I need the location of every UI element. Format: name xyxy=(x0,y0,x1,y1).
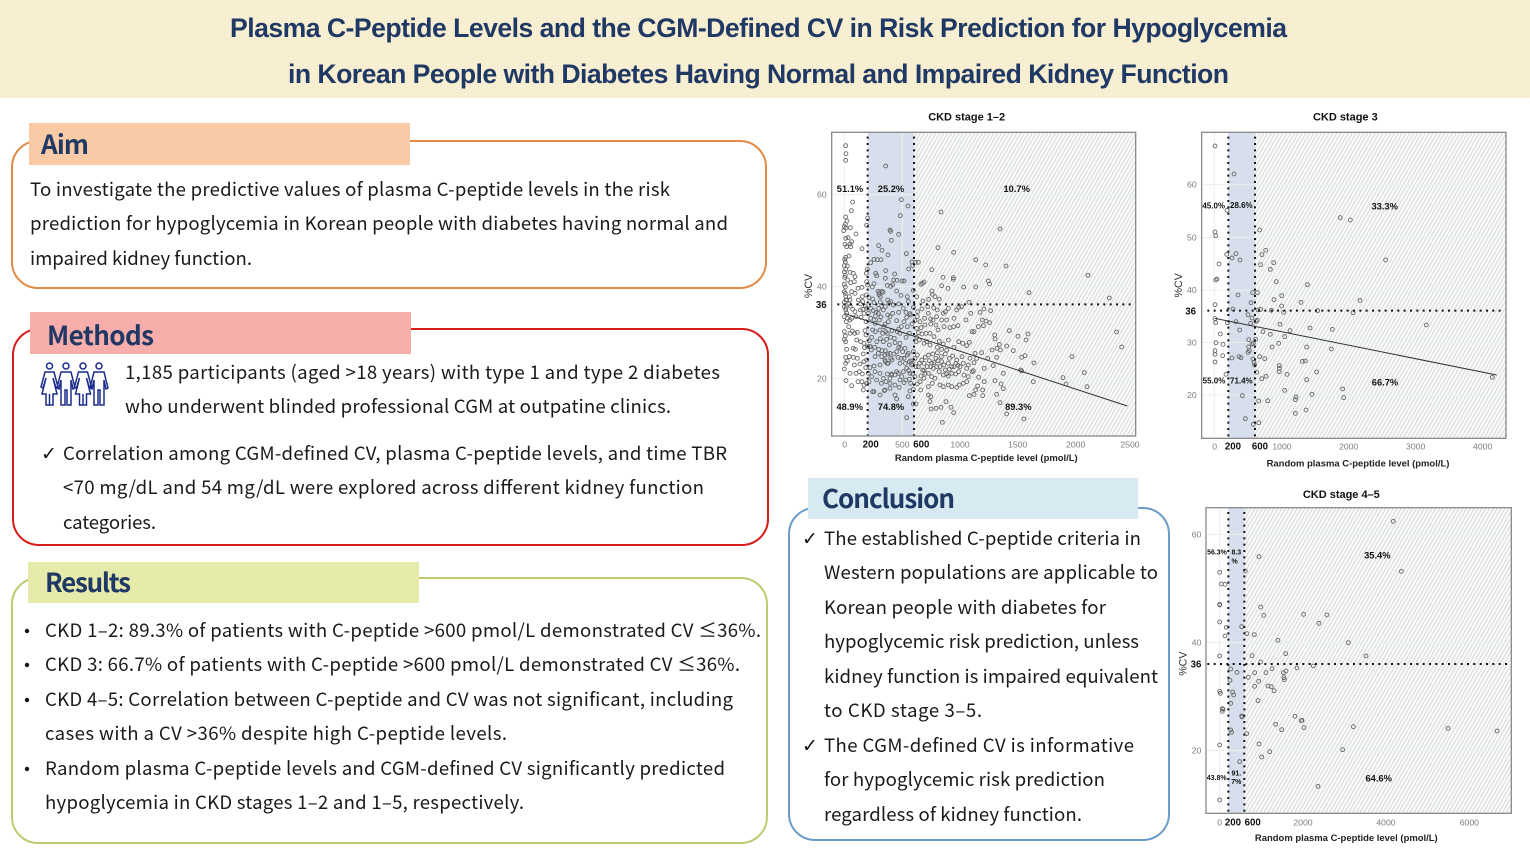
chart: CKD stage 4-5 scatter: 43.8% xyxy=(1207,775,1227,782)
chart: CKD stage 4-5 scatter: Random plasma C-peptide level (pmol/L) xyxy=(1255,833,1438,844)
text block: correlation: ✓ xyxy=(41,443,57,465)
chart: CKD stage 3 scatter: 3000 xyxy=(1406,441,1425,451)
chart: CKD stage 4-5 scatter: 36 xyxy=(1191,659,1202,670)
chart: CKD stage 1-2 scatter: %CV xyxy=(803,273,815,298)
chart: CKD stage 3 scatter: 30 xyxy=(1187,337,1197,347)
chart: CKD stage 3 scatter: 200 xyxy=(1225,442,1241,453)
text block: conclusion list: kidney function is impaired equivalent xyxy=(824,662,1158,689)
chart: CKD stage 4-5 scatter: 6000 xyxy=(1460,817,1479,827)
chart: CKD stage 4-5 scatter: % xyxy=(1232,558,1239,565)
chart: CKD stage 4-5 scatter: 56.3% xyxy=(1207,550,1228,557)
text block: conclusion list: to CKD stage 3–5. xyxy=(824,696,982,723)
chart: CKD stage 1-2 scatter: 200 xyxy=(863,440,879,451)
chart: CKD stage 1-2 scatter: 74.8% xyxy=(878,402,905,412)
panel: conclusion xyxy=(789,478,1169,840)
chart: CKD stage 4-5 scatter: 91. xyxy=(1231,770,1241,777)
chart: CKD stage 4-5 scatter: 600 xyxy=(1245,818,1261,829)
text block: correlation: <70 mg/dL and 54 mg/dL were explored across different kidney function xyxy=(63,473,704,500)
text block: results list xyxy=(25,616,761,815)
text block: conclusion list: ✓ xyxy=(802,528,818,550)
chart: CKD stage 1-2 scatter: 10.7% xyxy=(1003,184,1031,194)
chart: CKD stage 4-5 scatter: %CV xyxy=(1178,651,1190,676)
chart: CKD stage 1-2 scatter: 51.1% xyxy=(837,184,864,194)
chart: CKD stage 3 scatter: 50 xyxy=(1187,232,1197,242)
heading: methods: Methods xyxy=(47,316,154,353)
chart: CKD stage 3 scatter: 2000 xyxy=(1339,441,1358,451)
text block: participants: who underwent blinded professional CGM at outpatine clinics. xyxy=(125,392,671,419)
panel: aim xyxy=(12,123,766,288)
chart: CKD stage 3 scatter: 36 xyxy=(1185,306,1197,317)
icon: participants xyxy=(41,363,108,405)
chart: CKD stage 3 scatter: 45.0% xyxy=(1202,201,1225,210)
chart: CKD stage 1-2 scatter: 500 xyxy=(895,439,910,449)
panel: results xyxy=(12,562,767,843)
chart: CKD stage 4-5 scatter: CKD stage 4–5 xyxy=(1303,489,1380,501)
chart: CKD stage 1-2 scatter: 0 xyxy=(842,439,847,449)
heading: results: Results xyxy=(45,563,131,600)
text block: correlation: Correlation among CGM-defined CV, plasma C-peptide levels, and time TBR xyxy=(63,439,727,466)
chart: CKD stage 1-2 scatter: 600 xyxy=(913,440,929,451)
chart: CKD stage 3 scatter: 28.6% xyxy=(1230,201,1253,210)
chart: CKD stage 3 scatter: 4000 xyxy=(1473,441,1492,451)
chart: CKD stage 4-5 scatter: 2000 xyxy=(1293,817,1313,827)
chart: CKD stage 1-2 scatter: 48.9% xyxy=(836,402,864,412)
chart: CKD stage 3 scatter: 33.3% xyxy=(1371,202,1399,212)
text block: results list: CKD 4–5: Correlation between C-peptide and CV was not significant, including xyxy=(45,685,734,712)
title banner xyxy=(0,0,1530,98)
chart: CKD stage 3 scatter: 1000 xyxy=(1272,441,1292,451)
text block: conclusion list: ✓ xyxy=(802,735,818,757)
text block: results list: CKD 1–2: 89.3% of patients with C-peptide >600 pmol/L demonstrated CV ≤36%. xyxy=(45,616,761,643)
chart: CKD stage 4-5 scatter xyxy=(1178,489,1511,844)
chart: CKD stage 1-2 scatter: 2500 xyxy=(1120,439,1140,449)
text block: conclusion list: Western populations are applicable to xyxy=(824,558,1158,585)
chart: CKD stage 1-2 scatter: CKD stage 1–2 xyxy=(928,111,1005,123)
chart: CKD stage 4-5 scatter: 35.4% xyxy=(1364,551,1391,561)
text block: aim: prediction for hypoglycemia in Korean people with diabetes having normal and xyxy=(30,209,728,236)
text block: correlation: categories. xyxy=(63,508,156,535)
chart: CKD stage 3 scatter: CKD stage 3 xyxy=(1313,111,1378,123)
panel: methods xyxy=(13,312,768,545)
text block: conclusion list: The established C-peptide criteria in xyxy=(824,524,1141,551)
chart: CKD stage 4-5 scatter: 60 xyxy=(1192,529,1202,539)
chart: CKD stage 4-5 scatter: 8.3 xyxy=(1231,550,1241,557)
text block: conclusion list: The CGM-defined CV is informative xyxy=(824,731,1134,758)
heading: results xyxy=(28,562,419,603)
text block: conclusion list: Korean people with diabetes for xyxy=(824,593,1107,620)
chart: CKD stage 3 scatter: %CV xyxy=(1173,272,1185,297)
chart: CKD stage 4-5 scatter: 0 xyxy=(1217,817,1222,827)
chart: CKD stage 1-2 scatter: 89.3% xyxy=(1005,402,1032,412)
text block: aim xyxy=(30,175,728,271)
text block: correlation xyxy=(41,439,727,535)
chart: CKD stage 1-2 scatter: 60 xyxy=(817,190,827,200)
chart: CKD stage 1-2 scatter: Random plasma C-peptide level (pmol/L) xyxy=(895,453,1078,464)
chart: CKD stage 4-5 scatter: 64.6% xyxy=(1365,774,1393,784)
text block: participants xyxy=(125,358,720,419)
title banner: in Korean People with Diabetes Having Normal and Impaired Kidney Function xyxy=(288,59,1229,89)
chart: CKD stage 3 scatter: 66.7% xyxy=(1372,377,1399,387)
chart: CKD stage 3 scatter: Random plasma C-peptide level (pmol/L) xyxy=(1267,458,1449,469)
chart: CKD stage 1-2 scatter: 40 xyxy=(817,282,827,292)
chart: CKD stage 4-5 scatter: 7% xyxy=(1231,779,1242,786)
chart: CKD stage 3 scatter xyxy=(1173,111,1506,469)
text block: results list: hypoglycemia in CKD stages 1–2 and 1–5, respectively. xyxy=(45,788,524,815)
chart: CKD stage 3 scatter: 20 xyxy=(1187,390,1197,400)
chart: CKD stage 1-2 scatter xyxy=(803,111,1140,464)
chart: CKD stage 4-5 scatter: 20 xyxy=(1192,746,1202,756)
chart: CKD stage 3 scatter: 60 xyxy=(1187,180,1197,190)
heading: conclusion xyxy=(808,478,1138,519)
chart: CKD stage 4-5 scatter: 4000 xyxy=(1376,817,1396,827)
text block: results list: CKD 3: 66.7% of patients with C-peptide >600 pmol/L demonstrated CV ≤36%. xyxy=(45,650,740,677)
text block: aim: To investigate the predictive values of plasma C-peptide levels in the risk xyxy=(30,175,671,202)
chart: CKD stage 1-2 scatter: 20 xyxy=(817,373,827,383)
text block: conclusion list xyxy=(802,524,1158,827)
chart: CKD stage 1-2 scatter: 2000 xyxy=(1066,439,1085,449)
chart: CKD stage 4-5 scatter: 40 xyxy=(1192,638,1202,648)
chart: CKD stage 3 scatter: 0 xyxy=(1212,441,1217,451)
text block: participants: 1,185 participants (aged >18 years) with type 1 and type 2 diabetes xyxy=(125,358,720,385)
chart: CKD stage 1-2 scatter: 25.2% xyxy=(878,184,905,194)
chart: CKD stage 4-5 scatter: 200 xyxy=(1225,818,1241,829)
text block: aim: impaired kidney function. xyxy=(30,244,252,271)
chart: CKD stage 1-2 scatter: 36 xyxy=(816,300,827,311)
chart: CKD stage 3 scatter: 71.4% xyxy=(1230,376,1253,385)
text block: results list: Random plasma C-peptide levels and CGM-defined CV significantly predicted xyxy=(45,754,725,781)
heading: methods xyxy=(30,312,411,354)
heading: aim xyxy=(29,123,410,165)
title banner: Plasma C-Peptide Levels and the CGM-Defined CV in Risk Prediction for Hypoglycemia xyxy=(230,13,1287,43)
heading: aim: Aim xyxy=(40,125,89,162)
text block: conclusion list: for hypoglycemic risk prediction xyxy=(824,765,1105,792)
text block: conclusion list: hypoglycemic risk prediction, unless xyxy=(824,627,1139,654)
chart: CKD stage 3 scatter: 600 xyxy=(1252,442,1268,453)
text block: conclusion list: regardless of kidney function. xyxy=(824,800,1082,827)
chart: CKD stage 3 scatter: 55.0% xyxy=(1203,377,1225,386)
heading: conclusion: Conclusion xyxy=(822,479,955,516)
chart: CKD stage 1-2 scatter: 1000 xyxy=(950,439,970,449)
text block: results list: cases with a CV >36% despite high C-peptide levels. xyxy=(45,719,507,746)
chart: CKD stage 1-2 scatter: 1500 xyxy=(1008,439,1027,449)
chart: CKD stage 3 scatter: 40 xyxy=(1187,285,1197,295)
